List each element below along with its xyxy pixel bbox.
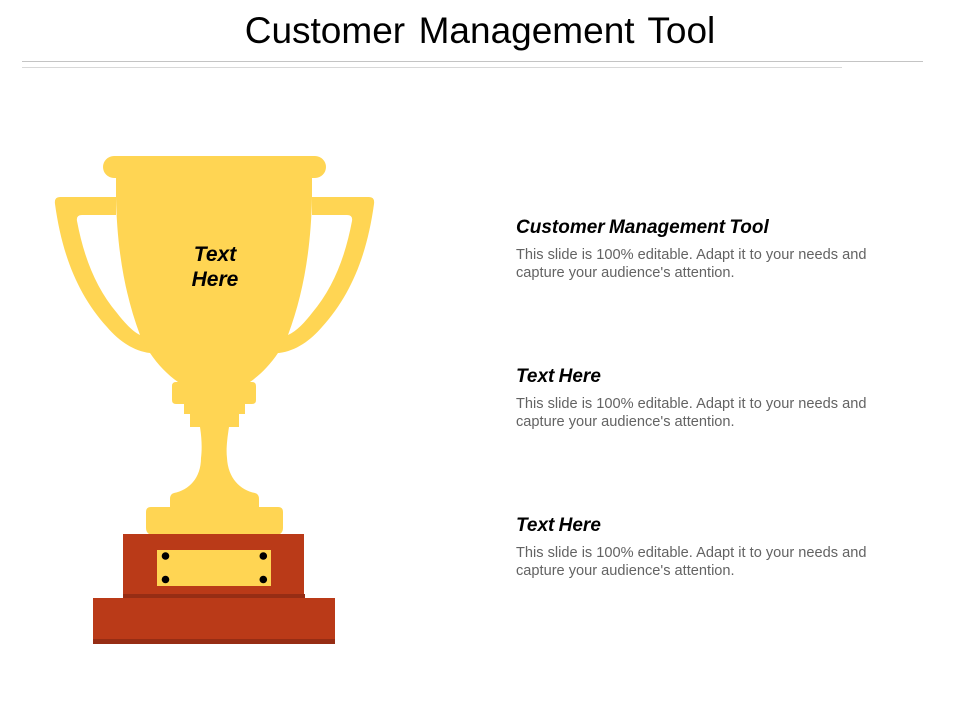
icon: trophy stem and foot <box>146 382 283 534</box>
title: Customer Management Tool <box>245 10 715 51</box>
trophy label <box>192 243 238 291</box>
heading 3: Text Here <box>516 515 601 536</box>
heading 1: Customer Management Tool <box>516 217 769 238</box>
lower plinth <box>93 598 335 644</box>
text block 3 <box>516 515 866 579</box>
text block 1 <box>516 217 866 281</box>
body 2: capture your audience's attention. <box>516 414 735 430</box>
trophy label: Text <box>194 243 236 266</box>
body 1 <box>516 246 866 281</box>
icon: trophy cup and handles <box>55 156 374 382</box>
body 3 <box>516 544 866 579</box>
header rule top <box>22 61 923 62</box>
body 2 <box>516 396 866 430</box>
body 3: This slide is 100% editable. Adapt it to your needs and <box>516 544 866 560</box>
name plate with rivets <box>157 550 271 586</box>
heading 2: Text Here <box>516 366 601 387</box>
body 1: This slide is 100% editable. Adapt it to your needs and <box>516 246 866 262</box>
text block 2 <box>516 366 866 430</box>
trophy label: Here <box>192 268 238 291</box>
upper plinth <box>123 534 305 598</box>
header rule bottom <box>22 67 842 68</box>
body 2: This slide is 100% editable. Adapt it to your needs and <box>516 396 866 412</box>
body 3: capture your audience's attention. <box>516 563 735 579</box>
body 1: capture your audience's attention. <box>516 265 735 281</box>
